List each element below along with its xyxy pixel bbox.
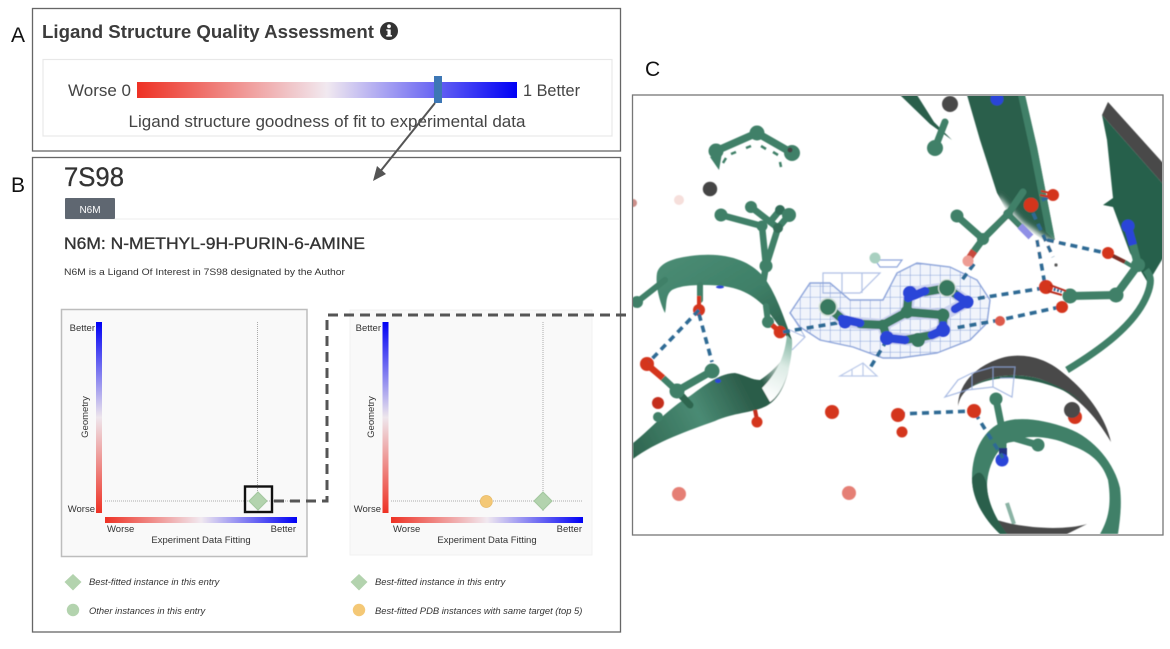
worse label: Worse 0 bbox=[68, 81, 131, 100]
label: B: B bbox=[11, 174, 25, 197]
chart: left scatter: Geometry bbox=[80, 396, 91, 438]
chart: right scatter: Worse bbox=[354, 504, 381, 515]
legend: right: Best-fitted instance in this entry bbox=[375, 576, 507, 587]
tab N6M: N6M bbox=[79, 205, 101, 216]
ball: grey and oxygen under crescent bbox=[1064, 402, 1082, 424]
chart: right scatter: Geometry bbox=[366, 396, 377, 438]
chart: left scatter: Worse bbox=[107, 524, 134, 535]
panel A: ligand structure quality assessment bbox=[32, 8, 620, 151]
stick group: isoleucine bbox=[714, 201, 796, 283]
ribbon: left strand bbox=[633, 255, 792, 459]
chart: right scatter: Worse bbox=[393, 524, 420, 535]
ribbon: helix bbox=[972, 419, 1121, 534]
hydrogen bonds bbox=[649, 195, 1106, 458]
stick group: lower left bbox=[640, 357, 721, 405]
chart: left scatter: Worse bbox=[68, 504, 95, 515]
panel C: 3D structure view bbox=[629, 92, 1163, 535]
structure view frame bbox=[632, 95, 1163, 535]
ligand name: N6M: N-METHYL-9H-PURIN-6-AMINE bbox=[64, 234, 365, 253]
panel B: ligand entry page bbox=[32, 158, 620, 632]
waters: oxygen spheres bbox=[652, 316, 1005, 501]
marker: PDB instance bbox=[480, 496, 492, 508]
faded ball above density bbox=[870, 252, 880, 264]
arrow: slider to entry bbox=[373, 103, 435, 181]
chart: right scatter: Better bbox=[356, 323, 381, 334]
ribbon: right sheet bbox=[1102, 102, 1163, 283]
chart: left scatter: Better bbox=[271, 524, 296, 535]
slider box bbox=[43, 60, 612, 136]
water: dark and faded bbox=[629, 96, 958, 207]
ribbon: thin coil right bbox=[1067, 270, 1150, 370]
chart: right scatter bbox=[350, 310, 592, 555]
electron density mesh bbox=[790, 260, 1015, 397]
ribbon: fading connector bbox=[762, 335, 792, 402]
stick group: upper right threonine bbox=[950, 189, 1059, 266]
legend: left bbox=[64, 574, 221, 616]
better label: 1 Better bbox=[523, 81, 580, 100]
icon: info bbox=[380, 22, 398, 40]
description: N6M is a Ligand Of Interest in 7S98 designated by the Author bbox=[64, 267, 345, 278]
stick group: left serine bbox=[631, 280, 786, 338]
gradient bar bbox=[137, 82, 517, 98]
legend: left: Best-fitted instance in this entry bbox=[89, 576, 221, 587]
ribbon: grey crescent bbox=[958, 356, 1111, 442]
ribbon: top centre sheet bbox=[967, 95, 1062, 256]
chart: right scatter: Better bbox=[557, 524, 582, 535]
marker: best-fitted diamond bbox=[534, 492, 552, 510]
stick: lysine near helix bbox=[990, 392, 1002, 424]
stick: top residue bbox=[927, 92, 1004, 156]
chart: left scatter: Better bbox=[70, 323, 95, 334]
connector: dashed line from highlight to structure bbox=[274, 315, 630, 501]
chart: left scatter bbox=[62, 310, 307, 556]
label: A: A bbox=[11, 24, 25, 47]
score marker bbox=[434, 76, 442, 103]
caption: Ligand structure goodness of fit to experimental data bbox=[128, 112, 526, 131]
heading: Ligand Structure Quality Assessment bbox=[42, 22, 374, 42]
ribbon: top left wedge bbox=[900, 95, 952, 140]
label: C: C bbox=[645, 58, 660, 81]
legend: right bbox=[350, 574, 582, 616]
entry id: 7S98 bbox=[64, 162, 124, 192]
chart: left scatter: Experiment Data Fitting bbox=[151, 535, 251, 546]
chart: right scatter: Experiment Data Fitting bbox=[437, 535, 537, 546]
highlight square bbox=[245, 486, 272, 512]
stick group: top left residue bbox=[708, 126, 800, 170]
legend: right: Best-fitted PDB instances with same target (top 5) bbox=[375, 605, 582, 616]
ligand N6M bbox=[818, 279, 974, 347]
divider tab row bbox=[65, 218, 620, 220]
stick: helix side chain bbox=[996, 438, 1044, 466]
tab N6M bbox=[65, 198, 115, 219]
marker: best-fitted diamond bbox=[249, 492, 267, 510]
small dark fleck bbox=[1054, 263, 1058, 267]
stick group: right arginine bbox=[1039, 220, 1145, 313]
legend: left: Other instances in this entry bbox=[89, 605, 207, 616]
